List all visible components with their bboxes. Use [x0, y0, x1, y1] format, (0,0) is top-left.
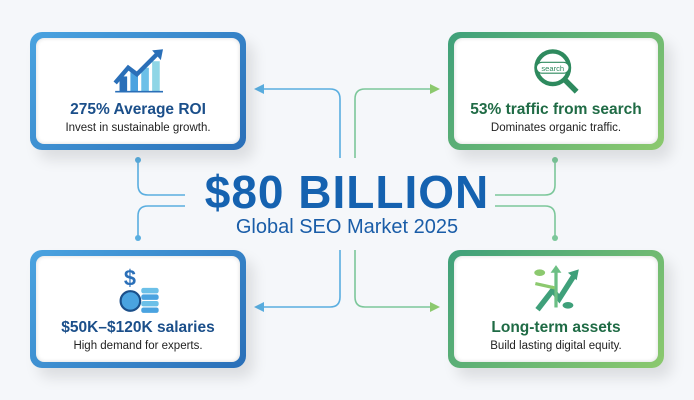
subtitle: Global SEO Market 2025: [236, 216, 458, 238]
text: Build lasting digital equity.: [490, 340, 622, 352]
icon: growth chart: [114, 49, 163, 92]
panel: search: [448, 32, 664, 150]
text: High demand for experts.: [73, 340, 203, 352]
icon: search: search: [541, 64, 564, 73]
heading: Long-term assets: [491, 319, 621, 336]
heading: 53% traffic from search: [470, 101, 642, 118]
icon: search: [534, 49, 578, 94]
icon: arrows leaves: [534, 265, 579, 312]
heading: $50K–$120K salaries: [61, 319, 215, 336]
text: Invest in sustainable growth.: [65, 122, 211, 134]
icon: money: [120, 266, 159, 313]
panel: ROI: [30, 32, 246, 150]
title: $80 BILLION: [205, 166, 489, 218]
icon: money: $: [124, 266, 136, 291]
panel: long-term assets: [448, 250, 664, 368]
panel: salaries: [30, 250, 246, 368]
heading: 275% Average ROI: [70, 101, 206, 118]
text: Dominates organic traffic.: [491, 122, 621, 134]
